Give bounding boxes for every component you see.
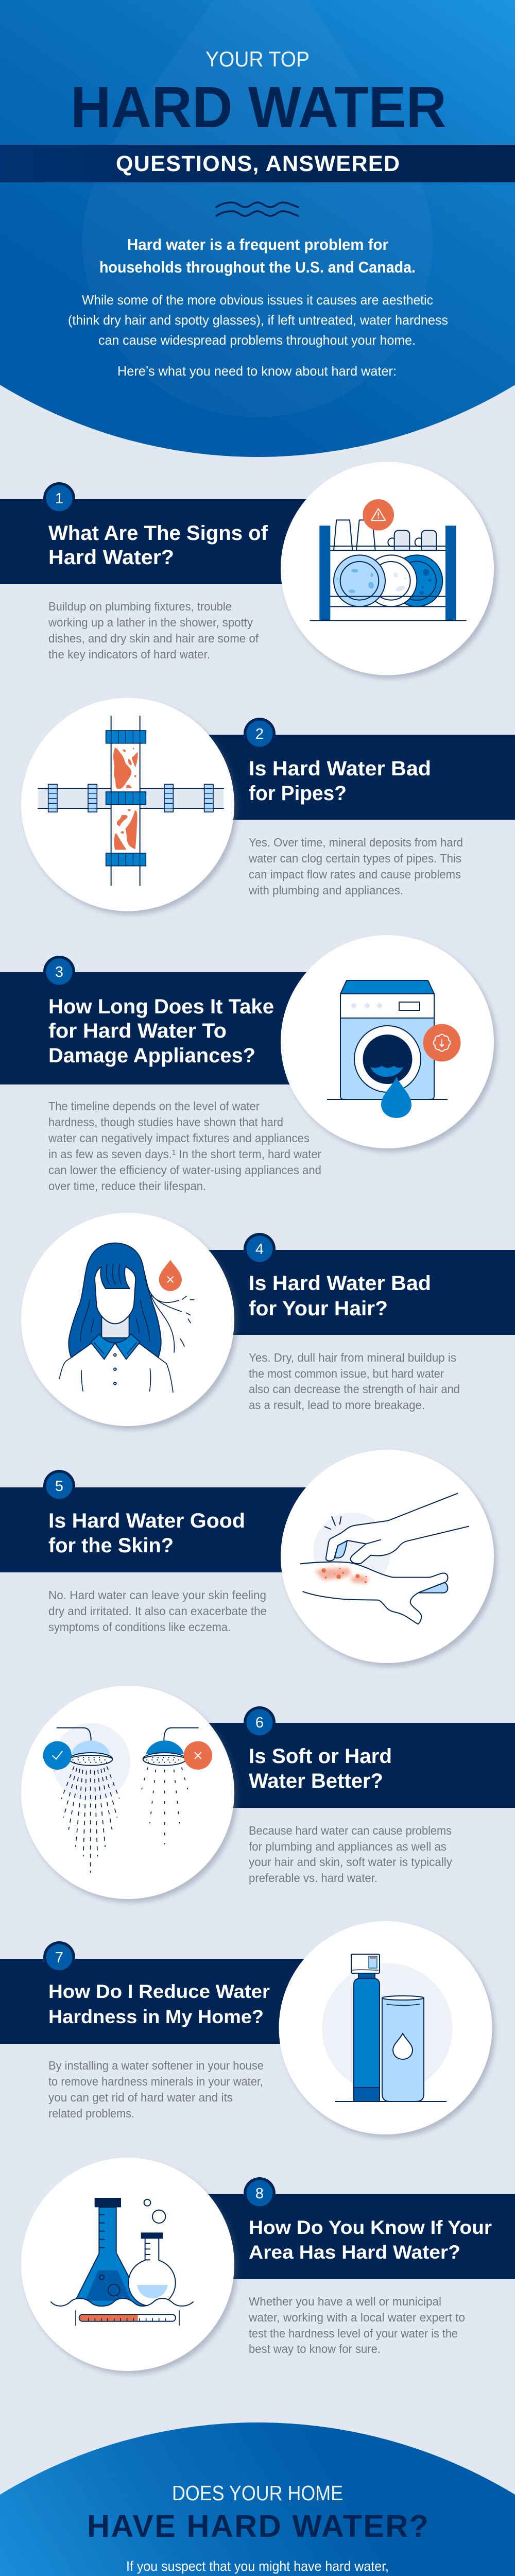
intro text [68,235,448,379]
heading 4: Is Hard Water Bad [249,1272,431,1295]
body 3: in as few as seven days.¹ In the short term, hard water [48,1147,321,1161]
heading 8: How Do You Know If Your [249,2217,492,2238]
body 1: the key indicators of hard water. [48,648,210,661]
badge 5 [43,1470,75,1502]
heading 2: Is Hard Water Bad [249,757,431,780]
body 6: Because hard water can cause problems [249,1824,452,1837]
panel: question 6 [21,1686,515,1899]
badge 4: 4 [255,1241,264,1258]
icon: dish rack [310,499,466,620]
title: QUESTIONS, ANSWERED [116,151,400,176]
heading 1: What Are The Signs of [48,522,268,545]
heading 1: Hard Water? [48,546,174,569]
icon: waves [216,202,298,216]
panel: question 7 [0,1921,492,2134]
body 7: By installing a water softener in your house [48,2059,264,2072]
icon: showers [43,1723,212,1873]
heading 2: for Pipes? [249,782,347,805]
body 4: also can decrease the strength of hair and [249,1382,460,1396]
body 1 [48,600,259,661]
intro text: (think dry hair and spotty glasses), if left untreated, water hardness [68,312,448,328]
badge 7 [43,1941,75,1973]
body 6: your hair and skin, soft water is typically [249,1855,452,1869]
body 5: symptoms of conditions like eczema. [48,1620,231,1634]
body 2: water can clog certain types of pipes. This [248,852,461,865]
icon: pipes [38,716,224,886]
body 7: related problems. [48,2107,134,2120]
heading 6: Is Soft or Hard [249,1745,392,1768]
title: YOUR TOP [205,47,310,71]
panel: question 1 [0,462,494,675]
intro text: Hard water is a frequent problem for [127,235,388,253]
body 5: No. Hard water can leave your skin feeling [48,1588,266,1602]
heading 3: for Hard Water To [48,1020,227,1042]
heading 2 [249,757,431,805]
intro text: can cause widespread problems throughout your home. [98,332,416,348]
intro text: Here’s what you need to know about hard water: [117,363,397,379]
badge 1 [43,482,75,514]
icon: water softener and glass [322,1954,453,2102]
body 2: Yes. Over time, mineral deposits from hard [249,836,463,849]
badge 4 [244,1233,276,1265]
intro text: While some of the more obvious issues it causes are aesthetic [82,292,433,308]
body 3: over time, reduce their lifespan. [48,1179,206,1193]
badge 6 [244,1706,276,1738]
badge 5: 5 [55,1478,63,1495]
panel: question 4 [21,1213,515,1426]
body 3: The timeline depends on the level of water [48,1099,260,1113]
badge 7: 7 [55,1950,63,1966]
body 3 [48,1099,321,1193]
icon: lab flasks and hardness gauge [51,2198,193,2330]
heading 6 [249,1745,392,1792]
badge 3: 3 [55,964,63,980]
body 7: to remove hardness minerals in your water, [48,2075,263,2088]
body 1: Buildup on plumbing fixtures, trouble [48,600,232,613]
body 7 [48,2059,264,2120]
body 6 [249,1824,452,1885]
heading 4 [249,1272,431,1320]
body 7: you can get rid of hard water and its [48,2091,233,2104]
heading 7: How Do I Reduce Water [48,1981,270,2002]
panel: does your home have hard water [0,2422,515,2576]
body 8: best way to know for sure. [249,2342,381,2355]
icon: woman with dry hair [59,1243,194,1392]
heading 7 [48,1981,270,2027]
icon: scratching irritated skin [300,1494,469,1624]
title: HARD WATER [71,75,447,140]
intro text: households throughout the U.S. and Canada. [99,258,416,276]
body 2 [248,836,463,897]
body 5 [48,1588,267,1634]
badge 3 [43,956,75,988]
panel: question 3 [0,935,494,1193]
icon: washing machine [327,980,460,1118]
badge 6: 6 [255,1715,264,1731]
heading 5: Is Hard Water Good [48,1510,245,1532]
panel: question 8 [21,2158,515,2371]
heading 3 [48,995,274,1067]
heading 1 [48,522,268,569]
call to action heading: DOES YOUR HOME [172,2481,343,2505]
heading 3: How Long Does It Take [48,995,274,1018]
title [0,47,515,182]
body 4: as a result, lead to more breakage. [249,1398,425,1412]
body 8: test the hardness level of your water is the [249,2327,458,2340]
call to action text: If you suspect that you might have hard water, [126,2558,389,2574]
body 1: dishes, and dry skin and hair are some of [48,632,259,645]
heading 4: for Your Hair? [249,1297,388,1320]
badge 2 [244,718,276,750]
body 4: the most common issue, but hard water [249,1367,444,1380]
heading 3: Damage Appliances? [48,1044,255,1067]
body 4: Yes. Dry, dull hair from mineral buildup is [249,1351,456,1364]
heading 5 [48,1510,245,1557]
body 6: preferable vs. hard water. [249,1871,377,1885]
body 6: for plumbing and appliances as well as [249,1840,447,1853]
body 3: water can negatively impact fixtures and appliances [48,1131,310,1145]
heading 6: Water Better? [249,1770,383,1792]
badge 1: 1 [55,490,63,507]
body 5: dry and irritated. It also can exacerbate the [48,1604,267,1618]
heading 7: Hardness in My Home? [48,2006,264,2027]
body 3: hardness, though studies have shown that hard [48,1115,283,1129]
panel: question 5 [0,1450,494,1663]
call to action heading: HAVE HARD WATER? [87,2509,428,2544]
badge 8 [244,2177,276,2209]
body 2: with plumbing and appliances. [248,884,403,897]
body 2: can impact flow rates and cause problems [249,868,461,881]
header panel [0,0,515,457]
body 3: can lower the efficiency of water-using appliances and [48,1163,321,1177]
body 1: working up a lather in the shower, spotty [48,616,253,629]
body 8: water, working with a local water expert to [248,2311,465,2324]
heading 5: for the Skin? [48,1534,174,1557]
heading 8: Area Has Hard Water? [249,2242,460,2263]
body 8: Whether you have a well or municipal [249,2295,441,2308]
body 8 [248,2295,465,2355]
badge 2: 2 [255,726,264,742]
call to action heading [87,2481,428,2544]
badge 8: 8 [255,2185,264,2202]
panel: question 2 [21,698,515,911]
heading 8 [249,2217,492,2263]
body 4 [249,1351,460,1412]
